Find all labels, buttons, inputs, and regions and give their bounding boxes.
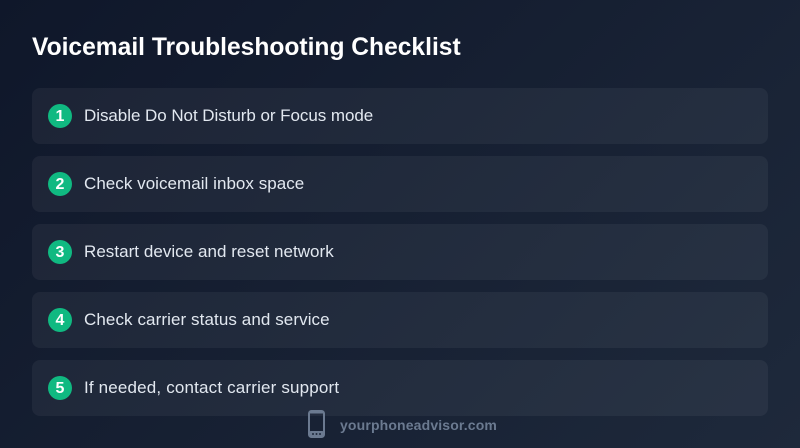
number badge 3: 3 [56, 244, 64, 261]
number badge 1 [48, 104, 72, 128]
item text 4: Check carrier status and service [84, 310, 330, 329]
checklist item 3 [32, 224, 768, 280]
number badge 5 [48, 376, 72, 400]
number badge 4 [48, 308, 72, 332]
title: Voicemail Troubleshooting Checklist [32, 34, 461, 61]
item text 2: Check voicemail inbox space [84, 174, 304, 193]
checklist item 5 [32, 360, 768, 416]
number badge 2: 2 [56, 176, 64, 193]
item text 3: Restart device and reset network [84, 242, 334, 261]
footer website: yourphoneadvisor.com [340, 417, 497, 433]
number badge 5: 5 [56, 380, 64, 397]
number badge 2 [48, 172, 72, 196]
checklist item 1 [32, 88, 768, 144]
checklist item 4 [32, 292, 768, 348]
item text 1: Disable Do Not Disturb or Focus mode [84, 106, 373, 125]
checklist item 2 [32, 156, 768, 212]
number badge 1: 1 [56, 108, 64, 125]
number badge 3 [48, 240, 72, 264]
number badge 4: 4 [56, 312, 64, 329]
icon: smartphone [308, 410, 325, 438]
item text 5: If needed, contact carrier support [84, 378, 339, 397]
